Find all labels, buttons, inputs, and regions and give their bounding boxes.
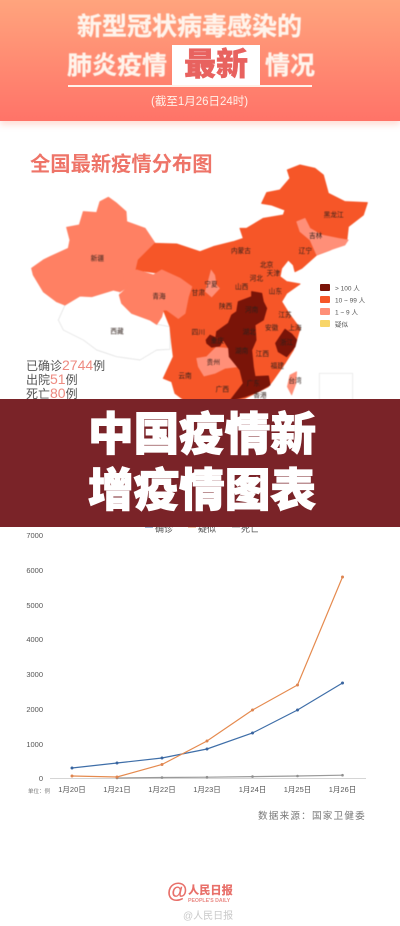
province labels: 北京 — [260, 260, 274, 269]
x axis labels: 1月20日 — [58, 785, 86, 794]
x axis labels: 1月22日 — [148, 785, 176, 794]
y axis labels: 6000 — [26, 566, 43, 575]
region: Zhejiang — [276, 329, 297, 357]
chart legend — [145, 523, 259, 534]
region: Xizang — [58, 290, 170, 360]
province labels: 山西 — [235, 282, 249, 291]
case statistics — [26, 357, 105, 401]
series: deaths — [116, 774, 344, 779]
province labels: 香港 — [253, 391, 267, 400]
province labels: 河南 — [245, 305, 259, 314]
date note: (截至1月26日24时) — [151, 96, 248, 108]
y axis labels: 4000 — [26, 635, 43, 644]
province labels: 湖北 — [243, 327, 256, 336]
discharged count: 出院51例 — [26, 371, 78, 387]
highlighted word box: 最新 — [184, 46, 248, 82]
province labels: 上海 — [288, 323, 302, 332]
logo english: PEOPLE'S DAILY — [188, 898, 230, 904]
region: Taiwan — [287, 372, 297, 395]
region: Qinghai — [119, 270, 192, 324]
logo mark: @ — [167, 880, 187, 903]
province labels: 广东 — [247, 378, 260, 387]
province labels: 广西 — [216, 385, 229, 394]
province labels: 黑龙江 — [324, 210, 344, 219]
x axis line — [50, 778, 366, 780]
region: Jilin — [297, 218, 348, 255]
y axis labels — [26, 531, 43, 783]
banner headline — [88, 409, 316, 516]
y axis labels: 1000 — [26, 740, 43, 749]
province labels: 山东 — [269, 286, 282, 295]
confirmed count: 已确诊2744例 — [26, 357, 105, 373]
province labels: 辽宁 — [299, 246, 312, 255]
province labels: 安徽 — [265, 323, 279, 332]
province labels: 台湾 — [288, 376, 302, 385]
highlighted word box — [172, 45, 260, 85]
legend: 10 to 99: 10 ~ 99 人 — [335, 296, 366, 304]
region: Xinjiang — [32, 197, 155, 305]
x axis labels: 1月24日 — [239, 785, 266, 794]
title line 1: 新型冠状病毒感染的 — [77, 13, 302, 41]
province labels: 宁夏 — [204, 279, 218, 288]
weibo handle: @人民日报 — [183, 911, 233, 922]
banner headline: 中国疫情新 — [88, 409, 316, 460]
province labels: 四川 — [192, 329, 205, 337]
province labels: 福建 — [271, 361, 284, 370]
series: suspected — [70, 576, 344, 778]
province labels: 重庆 — [211, 336, 224, 345]
province labels: 浙江 — [280, 337, 294, 346]
unit label: 单位：例 — [28, 787, 51, 795]
series: confirmed — [70, 682, 344, 770]
province labels: 陕西 — [219, 301, 233, 310]
x axis labels: 1月21日 — [103, 785, 131, 794]
province labels: 西藏 — [110, 326, 124, 335]
region: Hubei Hunan Henan Guangdong — [216, 292, 270, 401]
province labels: 云南 — [178, 371, 192, 380]
y axis labels: 0 — [39, 774, 43, 783]
header panel — [0, 0, 400, 121]
province labels: 新疆 — [91, 253, 104, 262]
province labels: 湖南 — [235, 346, 249, 355]
x axis labels: 1月25日 — [284, 785, 311, 794]
chart legend: 疑似 — [198, 524, 216, 534]
South China Sea inset — [319, 373, 353, 401]
province labels: 甘肃 — [192, 288, 205, 297]
legend: over 100: > 100 人 — [335, 284, 360, 292]
logo: People's Daily — [167, 880, 233, 904]
title line 2 right: 情况 — [265, 52, 315, 80]
y axis labels: 2000 — [26, 705, 43, 714]
legend: 1 to 9: 1 ~ 9 人 — [335, 308, 358, 316]
map heading: 全国最新疫情分布图 — [30, 154, 213, 176]
province labels: 天津 — [267, 269, 280, 277]
x axis labels: 1月23日 — [193, 785, 221, 794]
banner headline: 增疫情图表 — [88, 464, 316, 516]
region: Chongqing — [206, 335, 223, 347]
y axis labels: 3000 — [26, 670, 43, 679]
province labels: 吉林 — [309, 231, 323, 240]
province labels — [91, 210, 344, 400]
province labels: 内蒙古 — [231, 246, 251, 255]
province labels: 青海 — [152, 291, 166, 300]
logo name: 人民日报 — [188, 885, 233, 897]
region: main orange provinces — [136, 165, 367, 401]
title line 2 left: 肺炎疫情 — [67, 52, 167, 80]
x axis labels: 1月26日 — [329, 785, 356, 794]
legend: suspected: 疑似 — [335, 320, 348, 328]
data source: 数据来源：国家卫健委 — [258, 811, 366, 822]
province labels: 河北 — [250, 274, 263, 282]
y axis labels: 5000 — [26, 601, 43, 610]
region: Guizhou — [197, 347, 238, 376]
province labels: 江西 — [256, 350, 269, 358]
death count: 死亡80例 — [26, 385, 78, 401]
province labels: 江苏 — [278, 310, 292, 319]
x axis labels — [58, 785, 356, 794]
province labels: 贵州 — [207, 358, 220, 367]
overlay banner — [0, 399, 400, 527]
chart legend: 死亡 — [241, 523, 259, 534]
chart legend: 确诊 — [155, 523, 173, 534]
title underline — [68, 85, 312, 87]
region: Ningxia — [205, 269, 220, 297]
y axis labels: 7000 — [26, 531, 43, 540]
